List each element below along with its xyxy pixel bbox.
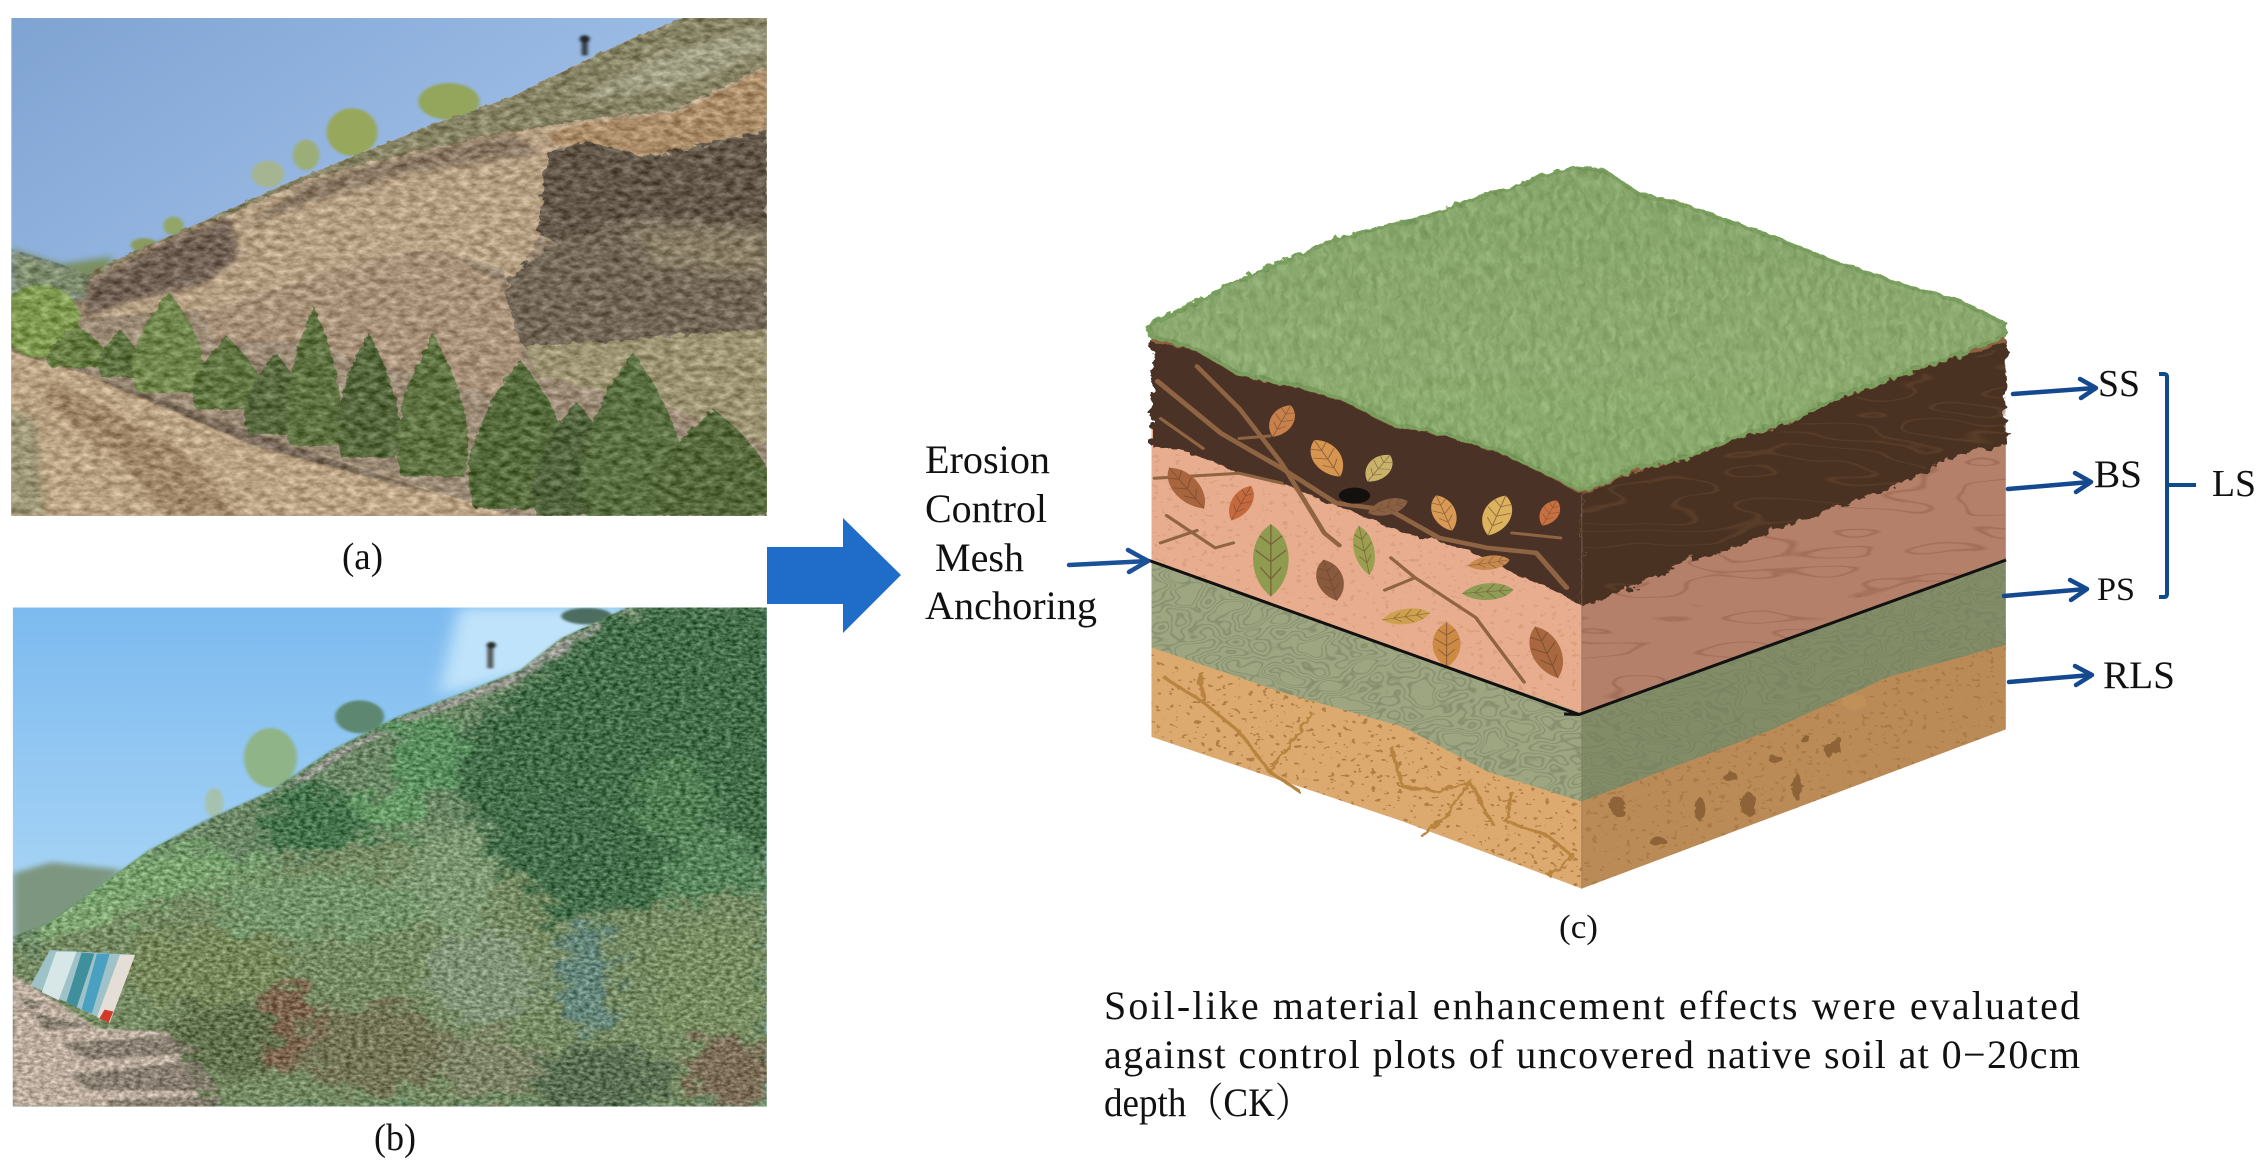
arrow: PS xyxy=(2004,580,2087,600)
shrubs along the road xyxy=(1,285,773,516)
label: Erosion Control Mesh Anchoring: Mesh xyxy=(935,535,1024,580)
label: PS: PS xyxy=(2097,572,2135,608)
gravel road with dappled shade xyxy=(13,974,219,1107)
layer: surface soil (SS) xyxy=(1152,336,2009,608)
label: Erosion Control Mesh Anchoring: Erosion xyxy=(925,437,1050,482)
note on control plots: against control plots of uncovered native soil at 0−20cm xyxy=(1104,1032,2080,1077)
layer: grass surface xyxy=(1145,165,2009,493)
arrow: SS xyxy=(2013,379,2096,398)
big blue arrow from photos to soil block xyxy=(767,518,901,633)
label: LS: LS xyxy=(2212,463,2256,505)
label: Erosion Control Mesh Anchoring: Anchoring xyxy=(925,583,1097,628)
label: Erosion Control Mesh Anchoring: Control xyxy=(925,486,1047,531)
mesh anchoring line across the block xyxy=(1145,559,2006,714)
soil block illustration xyxy=(1145,165,2009,891)
layer: remoulded loess soil (RLS) xyxy=(1148,627,2009,891)
caption (a): (a) xyxy=(342,536,383,578)
leaves and branches in the upper layers xyxy=(1155,366,1572,682)
note on control plots: Soil-like material enhancement effects were evaluated xyxy=(1104,983,2080,1028)
dirt road xyxy=(11,352,510,516)
photo (b): restored vegetated slope with signboards xyxy=(13,597,786,1112)
arrow: mesh anchoring pointer xyxy=(1069,550,1148,572)
caption (c): (c) xyxy=(1559,909,1598,946)
vegetation masses xyxy=(13,597,786,1112)
arrow: BS xyxy=(2008,473,2091,492)
bracket grouping SS, BS and PS into LS xyxy=(2159,374,2196,597)
note on control plots xyxy=(1104,983,2080,1125)
note on control plots: depth（CK） xyxy=(1104,1080,1312,1125)
label: Erosion Control Mesh Anchoring xyxy=(925,437,1097,628)
label: RLS: RLS xyxy=(2103,654,2175,697)
layer: buried subsoil (BS) xyxy=(1148,421,2009,717)
caption (b): (b) xyxy=(374,1117,416,1159)
arrow: RLS xyxy=(2009,666,2092,685)
signboards xyxy=(31,950,135,1023)
layer: pressed soil (PS) xyxy=(1148,555,2009,807)
photo (a): eroded bare slope with shrubs and dirt road xyxy=(1,18,773,516)
label: SS: SS xyxy=(2098,363,2140,405)
label: BS: BS xyxy=(2094,453,2142,496)
